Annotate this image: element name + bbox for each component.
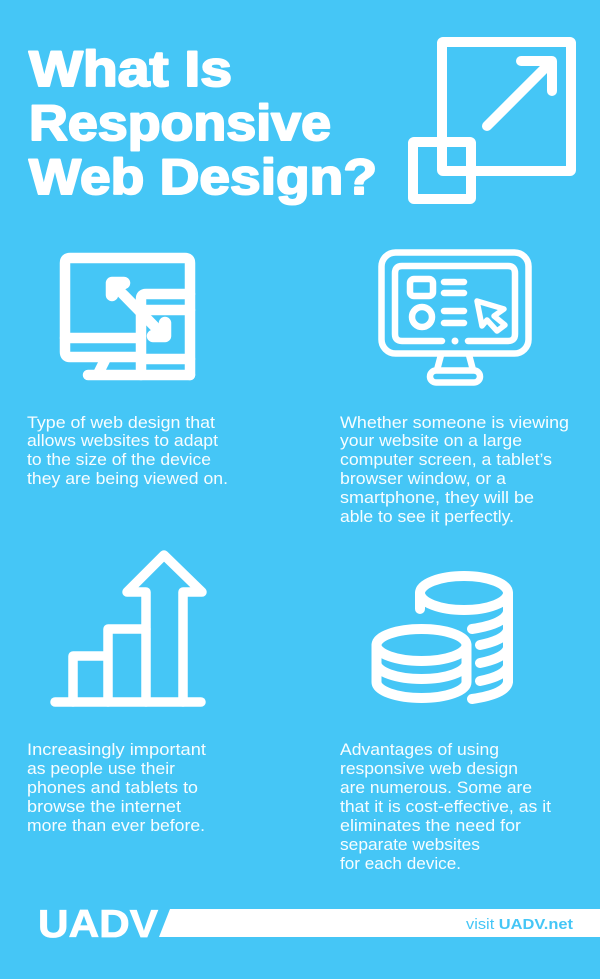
text: advantages of using: responsive web design [340, 760, 518, 778]
icon: resize squares with arrow [413, 42, 571, 199]
icon: desktop monitor with cursor [382, 252, 528, 382]
icon: monitor and phone resize [65, 258, 190, 375]
panel: advantages [340, 576, 551, 873]
text: type of web design [27, 414, 228, 488]
footer link: visit UADV.net: visit UADV.net [466, 916, 573, 933]
text: whether someone is viewing: able to see it perfectly. [340, 508, 514, 526]
panel: adapts to device [27, 258, 228, 488]
text: increasingly important: Increasingly important [27, 741, 206, 759]
text: advantages of using: are numerous. Some are [340, 779, 532, 797]
text: advantages of using: that it is cost-effective, as it [340, 798, 551, 816]
text: whether someone is viewing [340, 414, 569, 526]
title [29, 41, 377, 205]
text: advantages of using: eliminates the need for [340, 817, 522, 835]
footer white bar [159, 909, 600, 937]
text: advantages of using [340, 741, 551, 873]
text: advantages of using: separate websites [340, 836, 480, 854]
text: advantages of using: Advantages of using [340, 741, 499, 759]
text: increasingly important [27, 741, 206, 835]
title: What Is [29, 41, 232, 97]
title: Web Design? [29, 149, 377, 205]
text: whether someone is viewing: your website on a large [340, 432, 522, 450]
text: type of web design: to the size of the device [27, 451, 211, 469]
text: increasingly important: phones and tablets to [27, 779, 198, 797]
text: type of web design: they are being viewed on. [27, 470, 228, 488]
logo: UADV: UADV [38, 903, 158, 946]
text: increasingly important: more than ever before. [27, 817, 205, 835]
text: advantages of using: for each device. [340, 855, 461, 873]
panel: viewable on any screen [340, 252, 569, 526]
text: whether someone is viewing: Whether someone is viewing [340, 414, 569, 432]
footer [38, 903, 600, 946]
icon: stacks of coins [376, 576, 508, 699]
icon: growth bars with up arrow [55, 555, 202, 702]
text: increasingly important: as people use their [27, 760, 176, 778]
panel: increasingly important [27, 555, 206, 835]
text: whether someone is viewing: browser window, or a [340, 470, 507, 488]
text: whether someone is viewing: computer screen, a tablet’s [340, 451, 552, 469]
title: Responsive [29, 95, 331, 151]
text: type of web design: allows websites to adapt [27, 432, 218, 450]
text: increasingly important: browse the internet [27, 798, 181, 816]
text: type of web design: Type of web design that [27, 414, 215, 432]
text: whether someone is viewing: smartphone, they will be [340, 489, 534, 507]
